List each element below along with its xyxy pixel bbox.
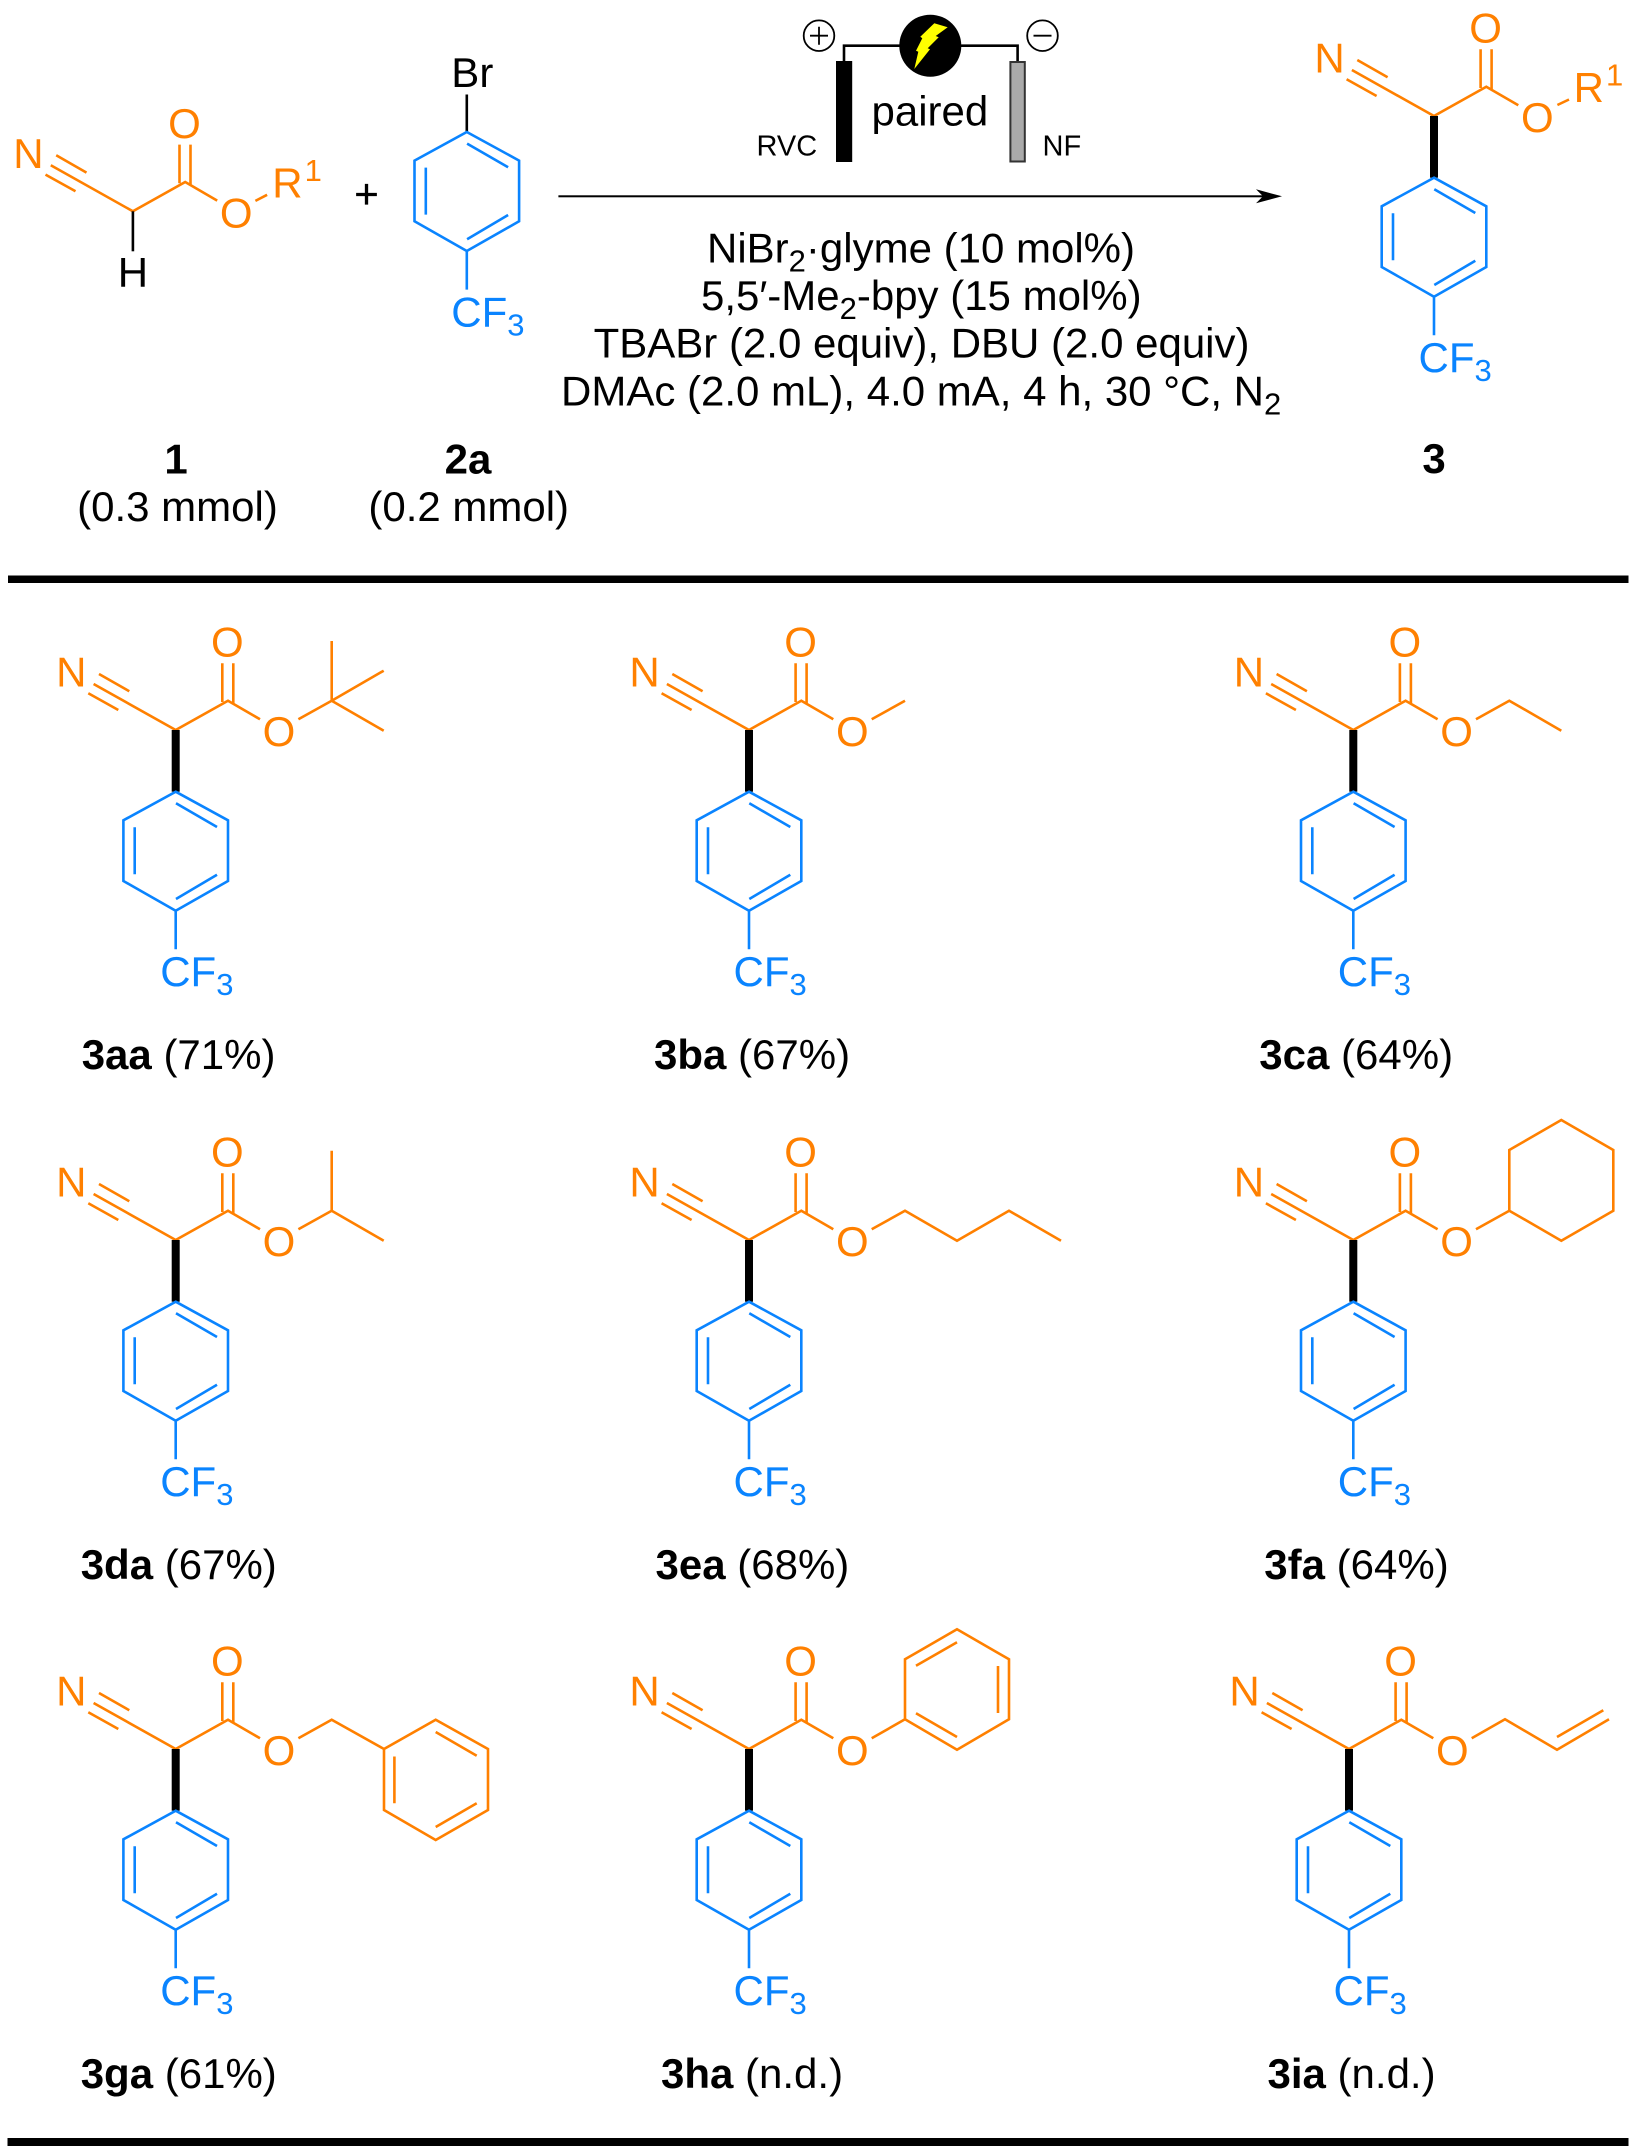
atom labels: O (1440, 708, 1473, 755)
reactant 1: cyanoacetate (13, 100, 322, 296)
aryl ring with CF3 bond (414, 132, 519, 290)
CF3 label: CF (1338, 1458, 1394, 1505)
reaction conditions: NiBr (707, 224, 789, 271)
atom labels: O (784, 619, 817, 666)
CF3 label: CF (1338, 948, 1394, 995)
yield label: 3da (67%) (81, 1541, 277, 1588)
aryl ring (1301, 1302, 1406, 1459)
bold bond (1349, 730, 1357, 792)
atom label Br: Br (451, 49, 493, 96)
CF3 label: 3 (790, 1477, 807, 1512)
atom labels: O (1440, 1218, 1473, 1265)
compound label 2a (368, 435, 569, 530)
bold bond (745, 730, 753, 792)
C-Br bond (465, 94, 468, 132)
aryl ring (697, 1302, 801, 1459)
atom label R1: 1 (305, 153, 322, 188)
atom label N: N (13, 130, 44, 177)
atom labels: O (211, 1638, 244, 1685)
atom labels: O (211, 619, 244, 666)
divider top (8, 576, 1628, 583)
reaction conditions: DMAc (2.0 mL), 4.0 mA, 4 h, 30 °C, N (561, 367, 1264, 414)
paired label: paired (872, 87, 988, 134)
bold bond (745, 1749, 753, 1811)
compound 3fa (1234, 1120, 1613, 1588)
aryl ring (1382, 178, 1486, 335)
compound label 1: 1 (164, 435, 188, 482)
atom labels: O (836, 1727, 869, 1774)
bold bond (1345, 1749, 1353, 1811)
CF3 label: 3 (1474, 353, 1492, 388)
aryl ring (1297, 1811, 1401, 1968)
atom labels: O (263, 1218, 295, 1265)
anode electrode (836, 61, 852, 162)
atom labels: N (56, 1159, 86, 1206)
ester and butyl bonds (662, 1173, 1061, 1241)
CF3 label: 3 (1394, 1477, 1411, 1512)
yield label: 3ca (64%) (1259, 1031, 1453, 1078)
aryl ring (697, 1811, 801, 1968)
atom labels: O (784, 1638, 817, 1685)
compound label 1: (0.3 mmol) (77, 483, 278, 530)
plus sign: + (354, 170, 379, 217)
aryl ring (123, 1811, 228, 1968)
CF3 label: CF (1334, 1967, 1390, 2014)
CF3 label: CF (1418, 334, 1474, 381)
ester and allyl bonds (1262, 1682, 1609, 1750)
cathode electrode (1010, 62, 1025, 162)
atom label carbonyl O: O (168, 100, 201, 147)
atom labels: O (1389, 619, 1421, 666)
yield label: 3ea (68%) (656, 1541, 849, 1588)
reaction conditions (561, 224, 1281, 421)
CF3 label: CF (734, 1967, 790, 2014)
atom label carbonyl O: O (1469, 5, 1502, 52)
compound 3da (56, 1129, 384, 1588)
CF3 label: CF (734, 1458, 790, 1505)
aryl ring (123, 1302, 228, 1459)
cyanoacetate bonds (45, 145, 267, 211)
compound 3aa (56, 619, 384, 1078)
compound 3ia (1229, 1638, 1609, 2097)
atom label R1: 1 (1606, 58, 1623, 92)
reaction conditions: 2 (789, 243, 806, 278)
atom labels: N (1234, 1159, 1264, 1206)
compound 3ga (56, 1638, 488, 2097)
RVC label: RVC (756, 130, 817, 162)
atom labels (629, 619, 869, 755)
compound label 2a: 2a (445, 435, 492, 482)
atom labels (56, 1129, 295, 1265)
ester fragment bonds (1347, 49, 1569, 116)
compound 3ca (1234, 619, 1561, 1078)
reaction conditions: TBABr (2.0 equiv), DBU (2.0 equiv) (594, 320, 1250, 367)
ester and ethyl bonds (1266, 663, 1561, 731)
yield label: 3ga (61%) (81, 2050, 277, 2097)
atom labels: O (211, 1129, 244, 1176)
bold bond (745, 1240, 753, 1302)
atom labels: O (1384, 1638, 1417, 1685)
compound label 1 (77, 435, 278, 530)
bold bond (172, 1749, 180, 1811)
compound 3ba (629, 619, 905, 1078)
reaction conditions: -bpy (15 mol%) (857, 272, 1142, 319)
reaction arrow (558, 189, 1282, 203)
CF3 label: 3 (790, 1986, 807, 2021)
CF3 label: 3 (1394, 967, 1411, 1002)
atom label ester O: O (1521, 94, 1554, 141)
atom label N: N (1314, 35, 1345, 82)
wires (844, 46, 1018, 61)
atom labels: N (56, 649, 86, 696)
ester and tert-butyl bonds (88, 641, 384, 731)
bold bond (1349, 1240, 1357, 1302)
NF label: NF (1042, 130, 1081, 162)
electrolysis cell icon (756, 15, 1081, 162)
CF3 label: CF (160, 948, 216, 995)
atom labels: N (1234, 649, 1264, 696)
bold bond (1430, 116, 1438, 178)
atom labels (1234, 619, 1473, 755)
atom labels (1229, 1638, 1469, 1774)
divider bottom (8, 2138, 1628, 2146)
atom labels: O (784, 1129, 817, 1176)
atom labels: N (1229, 1668, 1260, 1715)
CF3 label: 3 (1390, 1986, 1407, 2021)
plus terminal (804, 20, 834, 51)
C-H bond (132, 211, 134, 251)
atom labels (629, 1129, 869, 1265)
compound 3ea (629, 1129, 1061, 1588)
CF3 label: CF (451, 288, 507, 335)
ester and methyl bonds (662, 663, 905, 730)
atom labels: O (1389, 1129, 1421, 1176)
atom labels: N (56, 1668, 86, 1715)
atom label R1: R (272, 160, 303, 206)
yield label: 3aa (71%) (82, 1031, 275, 1078)
bold bond (172, 1240, 180, 1302)
reaction conditions: 2 (1264, 386, 1281, 421)
ester and cyclohexyl bonds (1266, 1120, 1613, 1241)
atom label ester O: O (220, 189, 253, 236)
atom labels: O (263, 1727, 295, 1774)
yield label: 3ba (67%) (654, 1031, 850, 1078)
atom labels (56, 1638, 295, 1774)
CF3 label: 3 (790, 967, 807, 1002)
yield label: 3ia (n.d.) (1268, 2050, 1436, 2097)
ester and isopropyl bonds (88, 1151, 384, 1241)
CF3 label: 3 (507, 307, 525, 342)
aryl ring (1301, 792, 1406, 949)
CF3 label: CF (160, 1967, 216, 2014)
atom labels: O (836, 708, 869, 755)
product 3 (1314, 5, 1623, 482)
atom labels: O (263, 708, 295, 755)
CF3 label: 3 (216, 1477, 233, 1512)
reaction conditions: ·glyme (10 mol%) (806, 224, 1135, 271)
ester and phenyl bonds (662, 1629, 1009, 1750)
atom label R1: R (1574, 64, 1604, 111)
CF3 label: 3 (216, 1986, 233, 2021)
CF3 label: CF (160, 1458, 216, 1505)
atom labels: N (629, 649, 660, 696)
atom labels: O (1436, 1727, 1469, 1774)
compound label 2a: (0.2 mmol) (368, 483, 569, 530)
atom labels: N (629, 1668, 660, 1715)
bold bond (172, 730, 180, 792)
atom labels (56, 619, 295, 755)
reaction conditions: 2 (840, 291, 857, 326)
compound label 3: 3 (1422, 435, 1446, 482)
yield label: 3fa (64%) (1264, 1541, 1449, 1588)
reactant 2a: aryl bromide (414, 49, 525, 342)
atom label H: H (118, 249, 148, 296)
CF3 label: CF (734, 948, 790, 995)
atom labels (1234, 1129, 1473, 1265)
reaction conditions: 5,5′-Me (701, 272, 840, 319)
minus terminal (1027, 20, 1058, 51)
ester and benzyl bonds (88, 1682, 488, 1840)
aryl ring (123, 792, 228, 949)
atom labels: O (836, 1218, 869, 1265)
yield label: 3ha (n.d.) (661, 2050, 843, 2097)
atom labels (629, 1638, 869, 1774)
compound 3ha (629, 1629, 1009, 2097)
atom labels: N (629, 1159, 660, 1206)
aryl ring (697, 792, 801, 949)
icon: lightning bolt (914, 23, 948, 69)
CF3 label: 3 (216, 967, 233, 1002)
power source circle (899, 15, 961, 77)
